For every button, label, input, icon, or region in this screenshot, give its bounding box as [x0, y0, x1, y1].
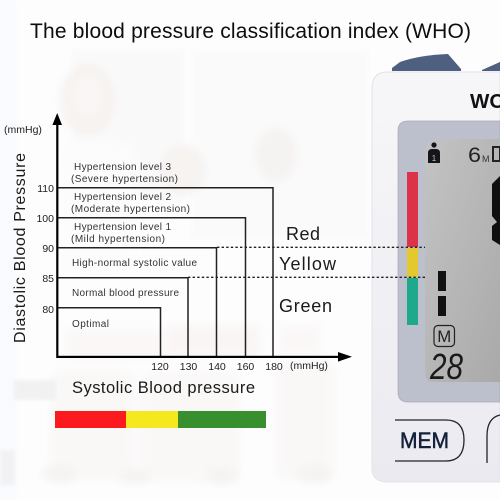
level bars — [438, 271, 446, 291]
MEM label: MEM — [400, 428, 449, 453]
y axis tick labels — [36, 183, 54, 316]
device body — [372, 72, 500, 482]
classification labels: (Severe hypertension) — [71, 174, 178, 185]
memory count: 28 — [429, 346, 463, 387]
colour scale bar — [55, 411, 266, 428]
classification labels: (Moderate hypertension) — [71, 204, 190, 215]
classification labels: Hypertension level 1 — [74, 222, 171, 233]
x axis title: Systolic Blood pressure — [72, 379, 255, 397]
blood pressure monitor device: M — [437, 327, 451, 346]
user icon — [428, 142, 440, 163]
y axis arrow — [52, 113, 62, 358]
y axis tick labels: 100 — [36, 213, 54, 225]
indicator strip — [407, 172, 418, 247]
classification labels: Optimal — [72, 319, 109, 330]
classification labels: Hypertension level 2 — [74, 192, 171, 203]
x axis tick labels — [151, 361, 283, 373]
x axis tick labels: 180 — [265, 361, 283, 373]
screen bezel — [398, 121, 500, 402]
x axis tick labels: 140 — [208, 361, 226, 373]
memory badge — [434, 326, 454, 346]
title: The blood pressure classification index (WHO) — [30, 20, 471, 43]
x axis tick labels: 160 — [237, 361, 254, 373]
x axis unit: (mmHg) — [290, 360, 328, 372]
y axis title: Diastolic Blood Pressure — [12, 153, 29, 343]
x axis tick labels: 130 — [180, 361, 197, 373]
classification labels: (Mild hypertension) — [71, 234, 165, 245]
systolic digit fragment — [492, 176, 500, 245]
y axis unit: (mmHg) — [4, 124, 42, 136]
y axis tick labels: 85 — [42, 273, 54, 285]
dotted threshold lines — [188, 247, 427, 277]
colour zone labels: Yellow — [279, 254, 337, 274]
blood pressure monitor device: M — [482, 154, 490, 164]
colour zone labels: Red — [286, 224, 320, 244]
blood pressure monitor device — [372, 54, 500, 482]
colour zone labels — [279, 224, 337, 316]
y axis tick labels: 80 — [42, 304, 54, 316]
x axis arrow — [57, 352, 352, 362]
classification labels: High-normal systolic value — [72, 258, 197, 269]
colour zone labels: Green — [279, 296, 332, 316]
second button — [487, 415, 500, 463]
x axis tick labels: 120 — [151, 361, 169, 373]
y axis tick labels: 90 — [42, 243, 54, 255]
classification labels — [71, 162, 197, 330]
user icon: 1 — [432, 154, 437, 163]
lcd panel — [425, 139, 500, 382]
classification labels: Normal blood pressure — [72, 288, 179, 299]
date digits: 6 — [468, 144, 481, 167]
MEM button — [395, 420, 464, 461]
y axis tick labels: 110 — [37, 183, 54, 195]
cuff — [392, 54, 461, 71]
classification labels: Hypertension level 3 — [74, 162, 171, 173]
classification staircase boxes — [58, 188, 273, 357]
